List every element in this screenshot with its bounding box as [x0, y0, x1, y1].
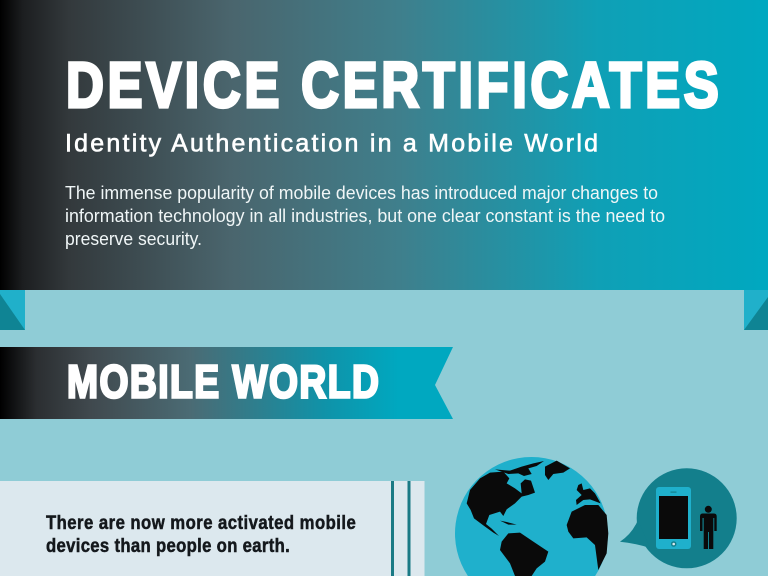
arctic islands [495, 461, 544, 476]
north america [467, 472, 535, 536]
section ribbon: mobile world [0, 347, 453, 419]
icon: person [700, 506, 717, 549]
intro paragraph: information technology in all industries, but one clear constant is the need to [65, 206, 665, 226]
europe [576, 483, 601, 505]
left fold triangle [0, 290, 25, 330]
fact text [46, 512, 356, 556]
south america [500, 533, 548, 576]
greenland [545, 461, 570, 480]
title: DEVICE CERTIFICATES [66, 50, 719, 121]
africa [567, 505, 608, 570]
subtitle: Identity Authentication in a Mobile World [65, 130, 598, 158]
fact text: There are now more activated mobile [46, 512, 356, 533]
intro paragraph: preserve security. [65, 229, 202, 249]
intro paragraph [65, 183, 665, 249]
icon: phone [656, 487, 691, 549]
fact text: devices than people on earth. [46, 535, 290, 556]
icon: speech bubble with phone and person [620, 468, 737, 568]
icon: globe [455, 457, 608, 576]
section heading: MOBILE WORLD [67, 356, 379, 407]
right fold triangle [744, 290, 768, 330]
panel: mobile devices fact [0, 481, 424, 576]
intro paragraph: The immense popularity of mobile devices has introduced major changes to [65, 183, 658, 203]
header band [0, 0, 768, 290]
caribbean [500, 521, 517, 525]
